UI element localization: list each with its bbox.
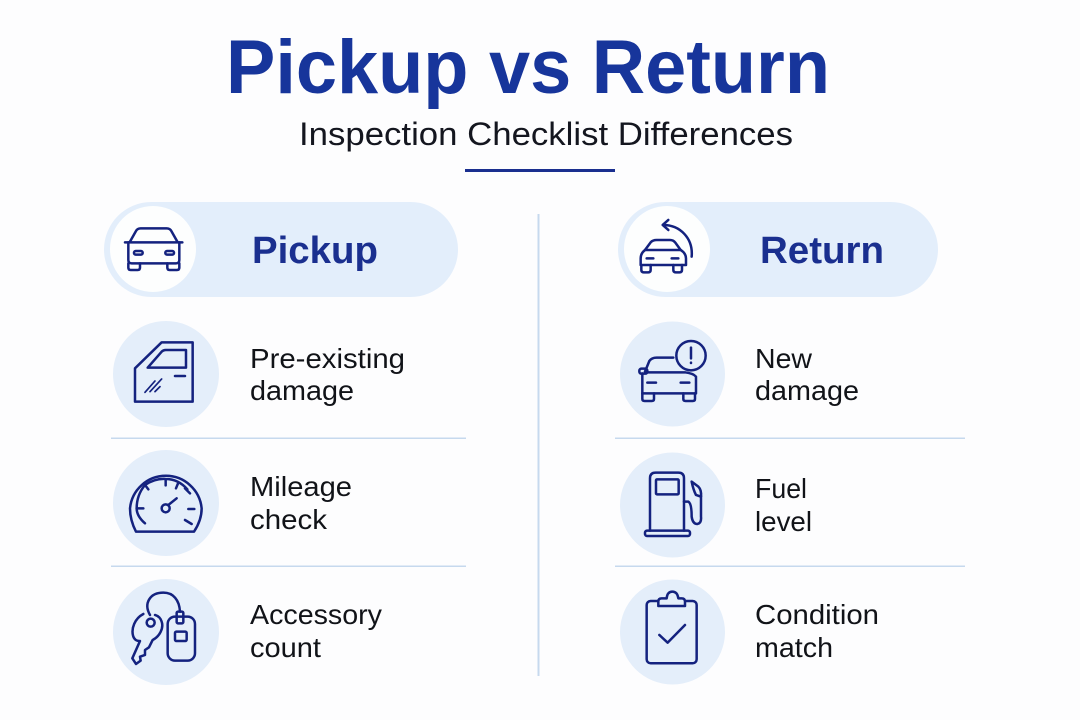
- panel: return: [615, 202, 965, 684]
- pickup header pill: [104, 202, 458, 297]
- icon: car door: [135, 342, 193, 402]
- checklist item: accessory count: count: [250, 632, 321, 663]
- icon: fuel pump: [645, 473, 701, 536]
- icon: car with alert: [639, 341, 706, 401]
- return header pill: Return: [760, 230, 884, 272]
- checklist item: new damage: damage: [755, 375, 859, 406]
- icon: keys and fob: [132, 593, 195, 664]
- pickup header pill: Pickup: [252, 230, 378, 272]
- icon: clipboard with check: [647, 592, 697, 663]
- checklist item: fuel level: [620, 452, 812, 558]
- checklist item: fuel level: Fuel: [755, 473, 807, 504]
- checklist item: pre-existing damage: [113, 321, 405, 427]
- checklist item: condition match: Condition: [755, 599, 879, 630]
- checklist item: new damage: [620, 322, 859, 426]
- checklist item: condition match: match: [755, 632, 833, 663]
- checklist item: mileage check: Mileage: [250, 471, 352, 502]
- icon: speedometer: [130, 476, 202, 532]
- checklist item: pre-existing damage: Pre-existing: [250, 343, 405, 374]
- checklist item: fuel level: level: [755, 506, 812, 537]
- checklist item: accessory count: [113, 579, 382, 685]
- panel: pickup: [104, 202, 466, 685]
- return header pill: [618, 202, 938, 297]
- checklist item: new damage: New: [755, 343, 813, 374]
- title: Pickup vs Return: [226, 25, 830, 110]
- checklist item: accessory count: Accessory: [250, 599, 382, 630]
- checklist item: pre-existing damage: damage: [250, 375, 354, 406]
- icon: car front: [125, 228, 182, 270]
- checklist item: condition match: [620, 580, 879, 684]
- icon: car with return arrow: [641, 220, 692, 272]
- checklist item: mileage check: check: [250, 504, 328, 535]
- subtitle: Inspection Checklist Differences: [299, 116, 793, 152]
- checklist item: mileage check: [113, 450, 352, 556]
